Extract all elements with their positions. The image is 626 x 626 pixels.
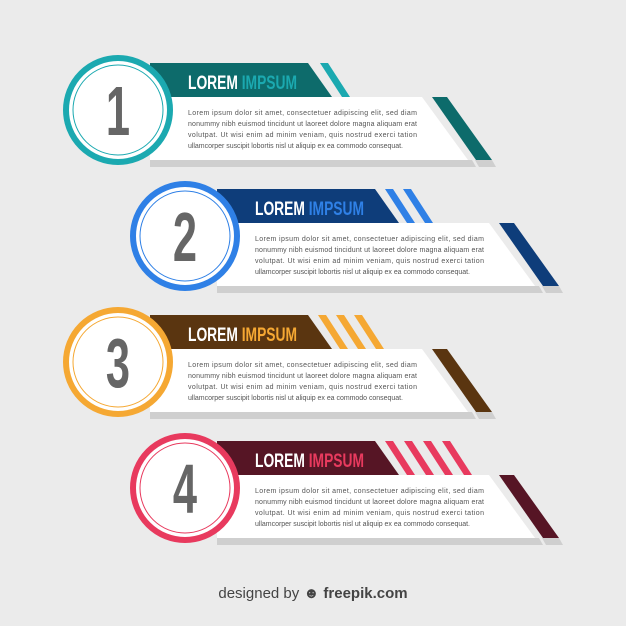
body text	[188, 362, 417, 402]
heading: LOREM IMPSUM	[255, 199, 364, 220]
item 2	[133, 184, 563, 293]
body text	[255, 488, 484, 528]
white panel	[150, 97, 468, 160]
number circle	[133, 184, 237, 288]
heading: LOREM IMPSUM	[188, 73, 297, 94]
number circle	[66, 310, 170, 414]
header bar	[150, 315, 332, 349]
accent stripes	[385, 441, 472, 475]
body text	[188, 110, 417, 150]
accent stripes	[385, 189, 433, 223]
item 3	[66, 310, 496, 419]
shadow	[150, 160, 476, 167]
accent stripes	[320, 63, 350, 97]
body text: Lorem ipsum dolor sit amet, consectetuer adipiscing elit, sed diam	[255, 488, 484, 495]
number circle	[66, 58, 170, 162]
header bar	[217, 189, 399, 223]
heading: LOREM IMPSUM	[188, 325, 297, 346]
dark stripe	[432, 97, 492, 160]
body text: ullamcorper suscipit lobortis nisl ut aliquip ex ea commodo consequat.	[255, 521, 470, 528]
body text: volutpat. Ut wisi enim ad minim veniam, quis nostrud exerci tation	[188, 384, 417, 391]
header bar	[150, 63, 332, 97]
shadow	[217, 286, 543, 293]
dark stripe	[499, 223, 559, 286]
white panel	[217, 223, 535, 286]
body text: Lorem ipsum dolor sit amet, consectetuer adipiscing elit, sed diam	[188, 110, 417, 117]
body text: Lorem ipsum dolor sit amet, consectetuer adipiscing elit, sed diam	[188, 362, 417, 369]
body text	[255, 236, 484, 276]
dark stripe	[432, 349, 492, 412]
body text: nonummy nibh euismod tincidunt ut laoreet dolore magna aliquam erat	[188, 121, 417, 128]
shadow	[217, 538, 543, 545]
body text: volutpat. Ut wisi enim ad minim veniam, quis nostrud exerci tation	[255, 510, 484, 517]
body text: nonummy nibh euismod tincidunt ut laoreet dolore magna aliquam erat	[188, 373, 417, 380]
item 1	[66, 58, 496, 167]
number circle: 1	[106, 72, 130, 151]
dark stripe	[499, 475, 559, 538]
number circle: 4	[173, 450, 198, 529]
accent stripes	[318, 315, 384, 349]
footer credit: designed by ☻ freepik.com	[218, 585, 408, 602]
body text: Lorem ipsum dolor sit amet, consectetuer adipiscing elit, sed diam	[255, 236, 484, 243]
body text: nonummy nibh euismod tincidunt ut laoreet dolore magna aliquam erat	[255, 247, 484, 254]
shadow	[150, 412, 476, 419]
body text: ullamcorper suscipit lobortis nisl ut aliquip ex ea commodo consequat.	[255, 269, 470, 276]
item 4	[133, 436, 563, 545]
body text: nonummy nibh euismod tincidunt ut laoreet dolore magna aliquam erat	[255, 499, 484, 506]
header bar	[217, 441, 399, 475]
body text: volutpat. Ut wisi enim ad minim veniam, quis nostrud exerci tation	[255, 258, 484, 265]
body text: ullamcorper suscipit lobortis nisl ut aliquip ex ea commodo consequat.	[188, 395, 403, 402]
white panel	[217, 475, 535, 538]
white panel	[150, 349, 468, 412]
number circle: 2	[173, 198, 197, 277]
heading: LOREM IMPSUM	[255, 451, 364, 472]
number circle: 3	[106, 324, 130, 403]
body text: ullamcorper suscipit lobortis nisl ut aliquip ex ea commodo consequat.	[188, 143, 403, 150]
body text: volutpat. Ut wisi enim ad minim veniam, quis nostrud exerci tation	[188, 132, 417, 139]
number circle	[133, 436, 237, 540]
